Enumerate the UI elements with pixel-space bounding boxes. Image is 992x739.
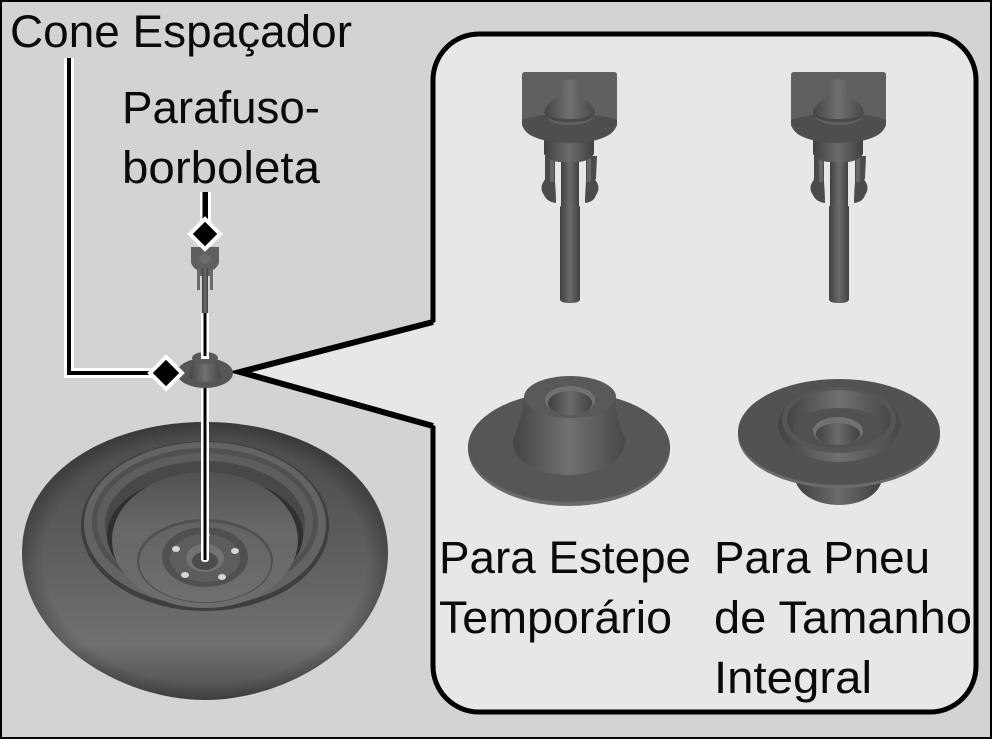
label: Cone Espaçador: Cone Espaçador (10, 6, 352, 57)
spare tire (22, 422, 388, 700)
icon: wing bolt for full size tire (791, 72, 886, 303)
callout pointer (240, 322, 436, 426)
wheel hub with lug nuts (162, 527, 248, 587)
wheel rim (81, 441, 329, 611)
label: Parafuso-borboleta: borboleta (122, 142, 321, 193)
label: Parafuso-borboleta: Parafuso- (122, 82, 320, 133)
leader line through wheel (201, 388, 209, 562)
icon: spacer cone for full size tire (738, 379, 940, 505)
label: full size tire: Integral (714, 652, 872, 703)
label: temporary spare (439, 532, 691, 643)
small wing bolt (191, 247, 219, 314)
label: Parafuso-borboleta (122, 82, 321, 193)
leader: Parafuso-borboleta (190, 192, 220, 249)
label: full size tire: de Tamanho (714, 592, 972, 643)
label: full size tire: Para Pneu (714, 532, 930, 583)
label: full size tire (714, 532, 972, 703)
panel: cone and bolt variants (240, 34, 976, 712)
label: temporary spare: Temporário (439, 592, 672, 643)
leader line between bolt and cone (201, 313, 209, 359)
icon: spacer cone for temporary spare (468, 376, 670, 506)
icon: wing bolt for temporary spare (522, 72, 617, 303)
small spacer cone (177, 352, 233, 388)
leader: Cone Espaçador (69, 58, 182, 389)
label: temporary spare: Para Estepe (439, 532, 691, 583)
